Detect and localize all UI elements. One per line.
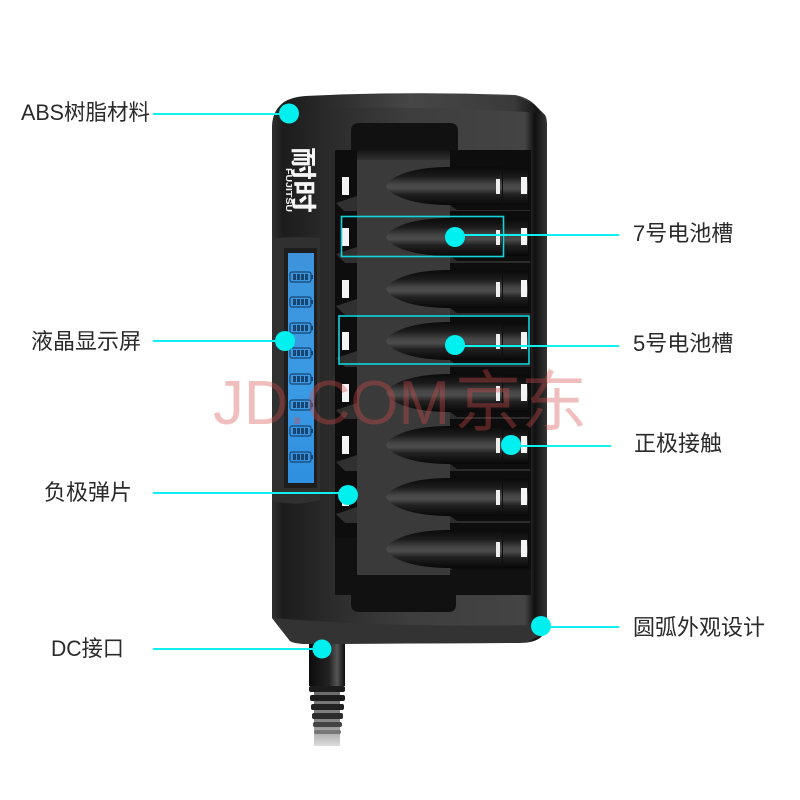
LCD screen (288, 253, 314, 483)
battery slot 1 (335, 160, 531, 213)
callout: AAA slot (445, 221, 733, 247)
charger body (272, 93, 547, 644)
callout: ABS (21, 100, 299, 125)
watermark: 京东 (455, 365, 587, 439)
highlight box: AA slot (339, 316, 529, 364)
callout: curved shell (531, 615, 765, 640)
battery slot 7 (335, 471, 531, 524)
callout: AAA slot: 7号电池槽 (633, 221, 733, 246)
watermark: JD.COM (213, 369, 450, 438)
callout: positive contact: 正极接触 (634, 431, 722, 456)
highlight box: AAA slot (342, 216, 504, 256)
callout: curved shell: 圆弧外观设计 (633, 615, 765, 640)
battery slot 5 (335, 367, 531, 420)
battery slot 3 (335, 263, 531, 316)
callout: positive contact (501, 431, 722, 456)
callout: DC port: DC接口 (51, 636, 124, 661)
callout: AA slot (445, 331, 733, 356)
lower well shade (335, 538, 531, 595)
logo: 耐时 (288, 147, 318, 213)
logo (284, 147, 318, 213)
callout: negative contact (44, 480, 358, 505)
callout: LCD: 液晶显示屏 (31, 329, 141, 354)
bottom finger tab (351, 590, 456, 612)
callout: DC port (51, 636, 332, 661)
battery well (335, 150, 531, 595)
LCD panel surround (272, 237, 320, 504)
logo: FUJITSU (284, 168, 293, 212)
callout: LCD (31, 329, 295, 354)
top finger tab (351, 123, 458, 150)
callout: ABS: ABS树脂材料 (21, 100, 150, 125)
callout: negative contact: 负极弹片 (44, 480, 132, 505)
battery slot 4 (335, 315, 531, 368)
watermark (213, 365, 587, 439)
battery slot 2 (335, 211, 531, 264)
DC power cable (309, 640, 345, 746)
battery slot 6 (335, 419, 531, 472)
battery slot 8 (335, 523, 531, 576)
callout: AA slot: 5号电池槽 (633, 331, 733, 356)
